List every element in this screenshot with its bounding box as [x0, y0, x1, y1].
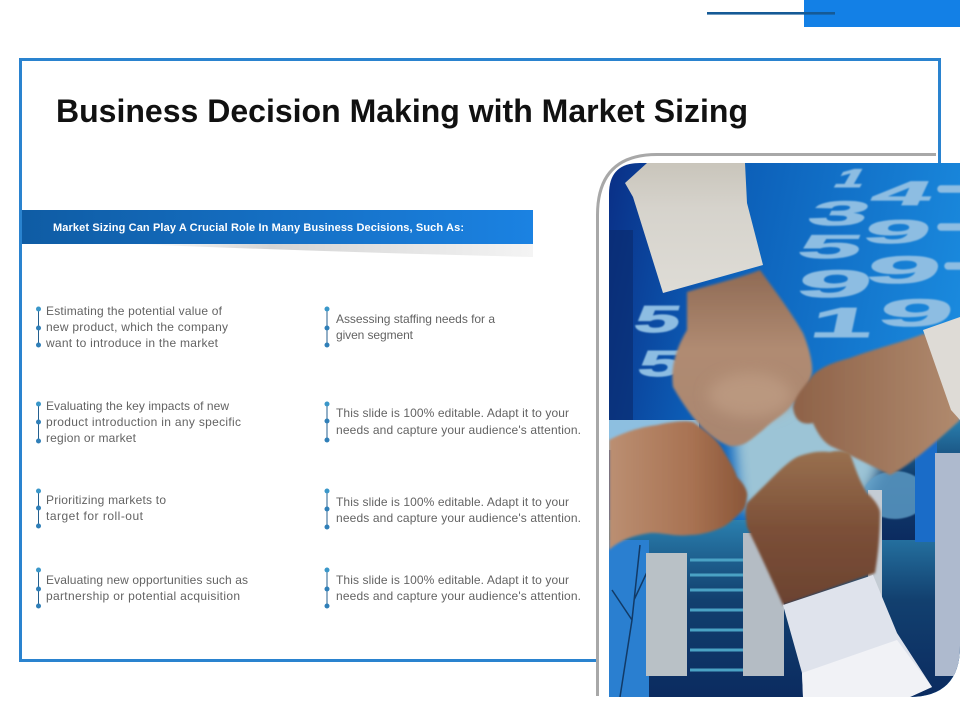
item: editable note 2: needs and capture your audience's attention. — [336, 511, 581, 525]
photo floating numerals: 5 — [792, 228, 869, 265]
photo floating numerals — [630, 164, 960, 384]
item: editable note 3: needs and capture your audience's attention. — [336, 589, 581, 603]
item: editable note 1: This slide is 100% editable. Adapt it to your — [336, 406, 569, 420]
item: editable note 1: needs and capture your audience's attention. — [336, 423, 581, 437]
photo floating numerals: 9 — [857, 213, 938, 250]
photo floating numerals: 9 — [872, 291, 960, 334]
photo hand: right fist and cuff — [793, 317, 960, 475]
photo translucent bars — [646, 453, 960, 676]
header banner — [22, 210, 533, 257]
photo background — [609, 163, 960, 697]
photo hand: bottom fist and white cuff — [746, 451, 932, 697]
photo floating numerals: 5 — [634, 343, 688, 384]
photo: four fists over financial background — [609, 163, 960, 697]
header banner: Market Sizing Can Play A Crucial Role In Many Business Decisions, Such As: — [53, 222, 464, 234]
item: editable note 3: This slide is 100% editable. Adapt it to your — [336, 573, 569, 587]
item: estimating value: new product, which the company — [46, 320, 228, 334]
item: evaluating opportunities: Evaluating new opportunities such as — [46, 573, 248, 587]
photo hand: left arm fist — [609, 421, 747, 550]
photo frame grey edge line — [598, 154, 936, 696]
photo hand: top-left fist and cuff — [625, 163, 812, 446]
top accent: blue block with line — [707, 0, 960, 27]
item: editable note 1 — [324, 402, 581, 442]
item: staffing needs: given segment — [336, 328, 414, 342]
item: evaluating impacts: region or market — [46, 431, 137, 445]
item: evaluating opportunities: partnership or potential acquisition — [46, 589, 240, 603]
photo frame: white mat with grey edge — [597, 155, 960, 700]
item: editable note 2 — [324, 488, 581, 530]
item: staffing needs — [324, 306, 495, 348]
photo floating numerals: 9 — [790, 262, 880, 305]
photo floating numerals: 3 — [802, 194, 878, 232]
item: evaluating impacts: product introduction in any specific — [46, 415, 241, 429]
title: Business Decision Making with Market Sizing — [56, 93, 748, 129]
photo floating numerals: 9 — [859, 248, 949, 291]
item: editable note 3 — [324, 568, 581, 608]
item: prioritizing markets: target for roll-out — [46, 509, 144, 523]
item: estimating value: Estimating the potential value of — [46, 304, 223, 318]
item: evaluating impacts — [36, 399, 241, 445]
item: evaluating impacts: Evaluating the key impacts of new — [46, 399, 229, 413]
photo floating numerals: 1 — [806, 299, 878, 346]
photo floating numerals: 4 — [865, 174, 941, 212]
item: estimating value: want to introduce in the market — [45, 336, 219, 350]
main blue frame — [20, 60, 940, 660]
item: estimating value — [36, 304, 228, 350]
item: evaluating opportunities — [36, 568, 248, 608]
right column list — [324, 306, 581, 608]
item: prioritizing markets: Prioritizing markets to — [46, 493, 166, 507]
item: prioritizing markets — [36, 488, 166, 528]
item: staffing needs: Assessing staffing needs for a — [336, 312, 495, 326]
item: editable note 2: This slide is 100% editable. Adapt it to your — [336, 495, 569, 509]
photo floating numerals: 1 — [829, 164, 874, 193]
left column list — [36, 304, 248, 608]
photo floating numerals: 5 — [630, 298, 686, 340]
